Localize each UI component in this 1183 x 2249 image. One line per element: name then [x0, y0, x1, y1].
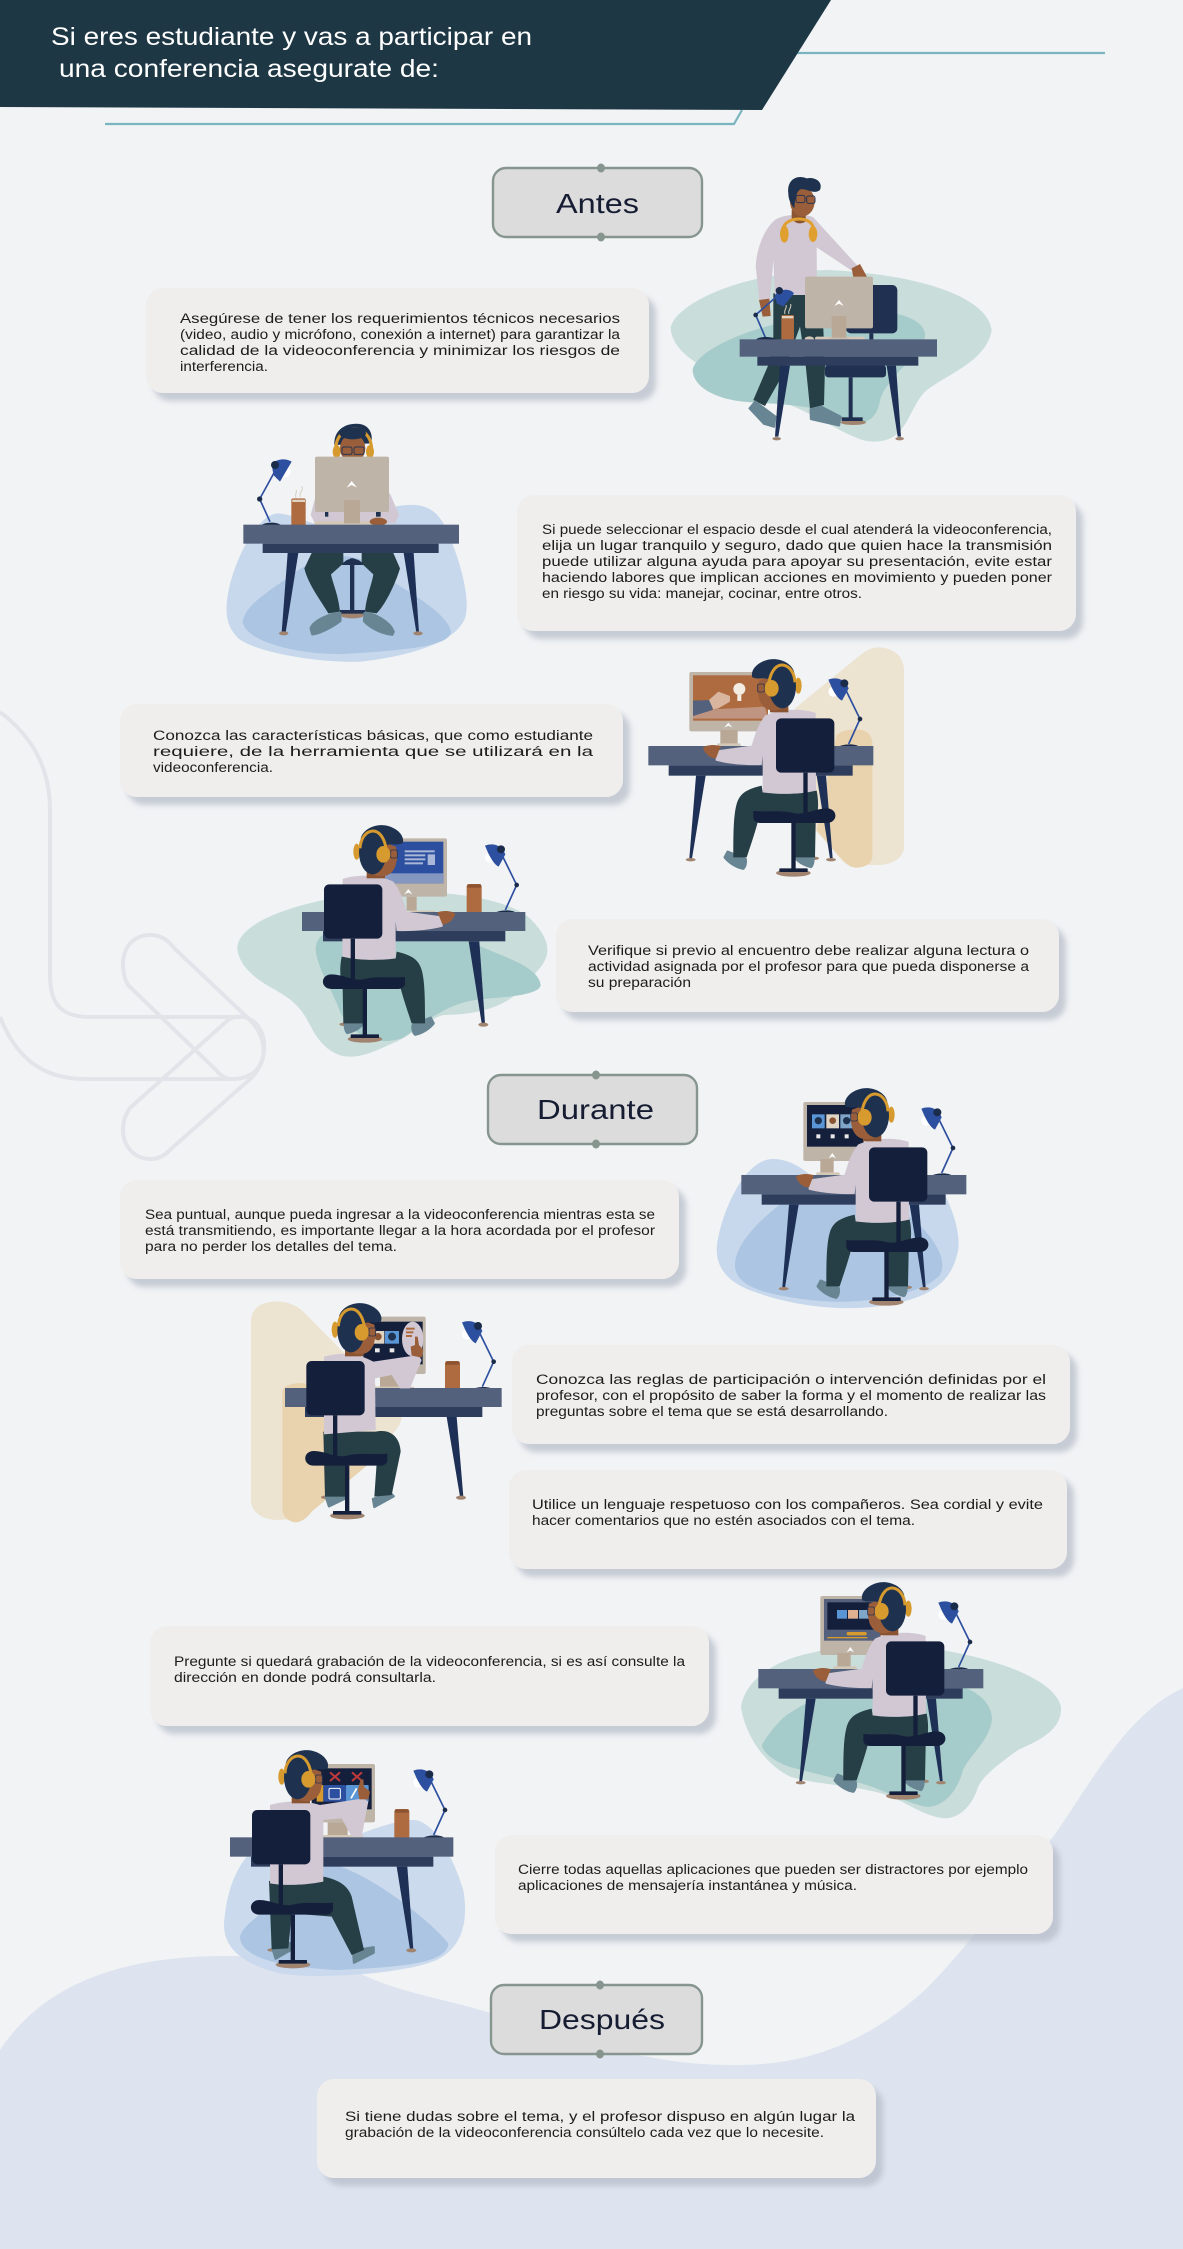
text box: puntual: está transmitiendo, es importante llegar a la hora acordada por el profesor	[145, 1223, 655, 1239]
text box: espacio	[517, 495, 1076, 631]
text box: herramienta: requiere, de la herramienta que se utilizará en la	[153, 744, 593, 760]
text box: distractores	[495, 1835, 1053, 1934]
text box: reglas: Conozca las reglas de participación o intervención definidas por el	[536, 1372, 1046, 1388]
text box: lenguaje: Utilice un lenguaje respetuoso con los compañeros. Sea cordial y evite	[532, 1497, 1043, 1513]
illustration: closing apps screen	[224, 1750, 465, 1976]
text box: dudas: Si tiene dudas sobre el tema, y el profesor dispuso en algún lugar la	[345, 2109, 855, 2125]
heading: Después	[491, 1980, 702, 2058]
text box: lectura: actividad asignada por el profesor para que pueda disponerse a	[588, 959, 1029, 975]
text box: espacio: puede utilizar alguna ayuda para apoyar su presentación, evite estar	[542, 554, 1052, 570]
illustration: participation screen	[251, 1302, 502, 1522]
text box: espacio: en riesgo su vida: manejar, cocinar, entre otros.	[542, 586, 862, 602]
text box: grabación: dirección en donde podrá consultarla.	[174, 1670, 436, 1686]
text box: distractores: aplicaciones de mensajería instantánea y música.	[518, 1878, 857, 1894]
illustration: video grid screen	[717, 1088, 966, 1308]
heading: Durante	[488, 1070, 697, 1148]
text box: herramienta: Conozca las características básicas, que como estudiante	[153, 728, 593, 744]
title: una conferencia asegurate de:	[59, 55, 439, 83]
text box: espacio: Si puede seleccionar el espacio desde el cual atenderá la videoconferencia,	[542, 522, 1052, 538]
header banner	[0, 0, 831, 110]
illustration: standing man at desk	[671, 177, 992, 442]
illustration: front view at desk	[227, 424, 467, 662]
text box: reglas: profesor, con el propósito de saber la forma y el momento de realizar las	[536, 1388, 1046, 1404]
text box: lectura	[556, 919, 1059, 1012]
heading: Durante: Durante	[537, 1094, 654, 1125]
background wave	[0, 1688, 1183, 2249]
text box: reglas: preguntas sobre el tema que se está desarrollando.	[536, 1404, 888, 1420]
title	[51, 23, 532, 83]
text box: herramienta	[120, 704, 623, 797]
text box: requerimientos: (video, audio y micrófono, conexión a internet) para garantizar la	[180, 327, 620, 343]
text box: requerimientos: Asegúrese de tener los requerimientos técnicos necesarios	[180, 311, 620, 327]
text box: espacio: elija un lugar tranquilo y seguro, dado que quien hace la transmisión	[542, 538, 1052, 554]
text box: dudas	[317, 2079, 876, 2178]
text box: puntual	[120, 1180, 679, 1279]
text box: lenguaje	[509, 1470, 1067, 1569]
heading: Después: Después	[539, 2004, 665, 2035]
text box: herramienta: videoconferencia.	[153, 760, 273, 776]
text box: espacio: haciendo labores que implican acciones en movimiento y pueden poner	[542, 570, 1052, 586]
text box: lectura: Verifique si previo al encuentro debe realizar alguna lectura o	[588, 943, 1029, 959]
text box: grabación: Pregunte si quedará grabación de la videoconferencia, si es así consulte la	[174, 1654, 685, 1670]
text box: requerimientos	[146, 288, 649, 393]
header banner lines	[105, 53, 1105, 124]
illustration: lightbulb screen	[648, 647, 904, 877]
heading: Antes	[493, 164, 702, 242]
illustration: recording screen	[741, 1582, 1061, 1818]
illustration: document screen	[237, 825, 547, 1057]
text box: requerimientos: calidad de la videoconferencia y minimizar los riesgos de	[180, 343, 620, 359]
title: Si eres estudiante y vas a participar en	[51, 23, 532, 51]
text box: distractores: Cierre todas aquellas aplicaciones que pueden ser distractores por ejemplo	[518, 1862, 1028, 1878]
heading: Antes: Antes	[556, 188, 639, 219]
text box: lenguaje: hacer comentarios que no estén asociados con el tema.	[532, 1513, 915, 1529]
text box: puntual: para no perder los detalles del tema.	[145, 1239, 397, 1255]
text box: requerimientos: interferencia.	[180, 359, 268, 375]
text box: lectura: su preparación	[588, 975, 691, 991]
decorative outline arrow	[0, 712, 264, 1159]
text box: dudas: grabación de la videoconferencia consúltelo cada vez que lo necesite.	[345, 2125, 824, 2141]
text box: reglas	[512, 1345, 1070, 1444]
text box: grabación	[150, 1626, 709, 1726]
text box: puntual: Sea puntual, aunque pueda ingresar a la videoconferencia mientras esta se	[145, 1207, 655, 1223]
